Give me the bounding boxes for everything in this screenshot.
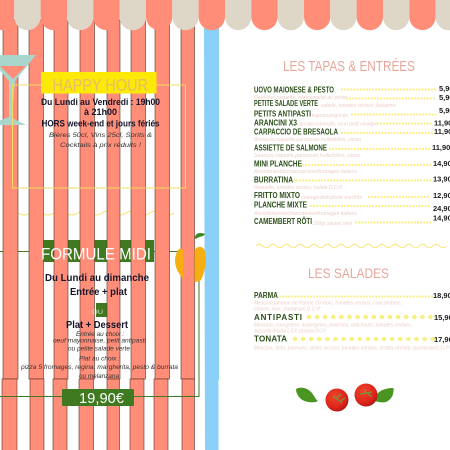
- item: carpaccio: Bresaola,roquette,parmesan,huiledolive, citron: [254, 137, 361, 143]
- item: burratina: Roquette, tomates cerises, bufala D.O.P.: [254, 185, 343, 191]
- formule midi bottom rule: [0, 396, 199, 398]
- item: planche mixte: PLANCHE MIXTE: [254, 200, 308, 210]
- formule midi choices: pizza 5 fromages, regina, margherita, pesto & burrata: [20, 364, 179, 371]
- item: antipasti: Mesclun, courgettes, aubergines, poivrons, artichauts, tomates cerises,: [254, 322, 412, 328]
- item: assiette de salmone: ASSIETTE DE SALMONE: [254, 144, 328, 152]
- item: parma: PARMA: [254, 291, 278, 300]
- happy hour schedule: HORS week-end et jours fériés: [42, 118, 160, 128]
- happy hour offer: [49, 132, 153, 149]
- formule midi choices: Entrée au choix :: [76, 331, 124, 338]
- item: assiette de salmone: 11,90: [432, 143, 450, 152]
- menu list: salades: [254, 291, 450, 352]
- panel: happy hour: [12, 72, 186, 188]
- formule midi choices: Plat au choix :: [79, 356, 120, 362]
- item: carpaccio: [254, 127, 450, 143]
- menu list: tapas: [253, 84, 450, 227]
- formule midi choices: ou melanzana: [79, 373, 120, 380]
- item: burratina: [254, 174, 450, 191]
- item: tonata: [254, 334, 450, 352]
- item: tonata: TONATA: [254, 334, 287, 344]
- heading: les tapas et entrees: LES TAPAS & ENTRÉES: [283, 58, 415, 75]
- plat dessert: Plat + Dessert: [66, 319, 128, 331]
- item: carpaccio: CARPACCIO DE BRESAOLA: [254, 128, 338, 136]
- ou label: OU: [92, 310, 103, 316]
- item: antipasti: ANTIPASTI: [254, 313, 302, 322]
- item: planche mixte: Assortimentdecharcuterieetfromages italiens: [253, 211, 357, 217]
- happy hour outline: [12, 85, 186, 188]
- item: planche mixte: [253, 200, 450, 217]
- formule midi offer: Entrée + plat: [70, 286, 127, 298]
- blue stripe: [204, 25, 219, 450]
- item: antipasti: [254, 313, 450, 334]
- item: petite salade verte: salade, tomates cerises ,balsamic: [321, 103, 396, 109]
- item: petite salade verte: [254, 93, 450, 109]
- item: antipasti: mozzarella di bufala D.O.P, parmesan D.O.P.: [254, 328, 326, 334]
- item: mini planche: [253, 159, 450, 175]
- decorative yellow wave behind stripes: [18, 211, 174, 215]
- item: camembert: CAMEMBERT RÔTI: [254, 217, 312, 226]
- panel: formule midi outline: [0, 252, 199, 396]
- item: uovo: [254, 84, 450, 101]
- item: uovo: UOVO MAIONESE & PESTO: [254, 86, 334, 94]
- item: mini planche: MINI PLANCHE: [254, 160, 303, 168]
- item: fritto mixto: FRITTO MIXTO: [254, 191, 300, 200]
- awning stripes lower: [2, 379, 194, 450]
- item: petits antipasti: PETITS ANTIPASTI: [254, 110, 311, 118]
- awning stripes upper: [3, 20, 194, 379]
- happy hour schedule: Du Lundi au Vendredi : 19h00: [41, 97, 160, 107]
- right tomato: [354, 384, 378, 406]
- right basil leaf: [375, 388, 394, 402]
- icon: tomatoes and basil: [296, 384, 394, 412]
- item: arancini: ARANCINI X3: [254, 118, 297, 128]
- icon: martini glass: [0, 55, 36, 125]
- panel: formule midi: [20, 244, 179, 407]
- happy hour heading: HAPPY HOUR: [52, 75, 148, 95]
- item: burratina: BURRATINA: [254, 176, 293, 184]
- item: parma: Mesclun,jambon de Parme 20 mois, tomates cerises, concombres,: [254, 300, 402, 306]
- left basil leaf: [296, 388, 318, 402]
- item: assiette de salmone: Saumon,roquette,parmesan,huiledolive, citron: [254, 153, 360, 159]
- happy hour offer: Bières 50cl, Vins 25cl, Sprits &: [49, 132, 153, 139]
- formule midi choices: [20, 331, 179, 380]
- price badge: [62, 389, 134, 407]
- item: petite salade verte: PETITE SALADE VERTE: [254, 99, 318, 108]
- item: parma: chèvre, noix, parmesan D.O.P.: [254, 306, 321, 312]
- item: camembert: 250gr,sauvet miel: [312, 221, 353, 227]
- item: arancini: sarciacciotomate, mon petit vinaigre: [297, 122, 378, 128]
- item: camembert: [254, 214, 450, 227]
- left tomato: [326, 388, 348, 412]
- formule midi offer: [45, 272, 149, 298]
- icon: yellow pepper: [175, 233, 206, 282]
- formule midi heading background: [43, 240, 154, 262]
- happy hour offer: Cocktails à prix réduits !: [60, 142, 141, 149]
- item: petits antipasti: [254, 106, 450, 119]
- item: parma: [254, 291, 450, 312]
- item: fritto mixto: [254, 191, 450, 201]
- item: assiette de salmone: [254, 143, 450, 159]
- item: arancini: [254, 118, 450, 128]
- item: mini planche: Assortimentdecharcuteriesetfromages italiens: [253, 169, 357, 175]
- item: uovo: Oeuf dur, roquette, mayonnaise au pesto: [254, 95, 347, 101]
- formule midi choices: oeuf mayonnaise, petit antipasti: [53, 338, 147, 344]
- formule midi choices: ou petite salade verte: [68, 346, 131, 352]
- ou badge background: [96, 303, 107, 317]
- item: petits antipasti: légumesmgrinés: [312, 113, 348, 119]
- item: fritto mixto: calongedefruitsde merfrits: [301, 195, 362, 201]
- yellow wave divider: [256, 244, 446, 248]
- price badge: 19,90€: [79, 390, 125, 407]
- happy hour schedule: [41, 97, 160, 128]
- happy hour schedule: à 21h00: [84, 107, 117, 117]
- formule midi offer: Du Lundi au dimanche: [45, 272, 149, 284]
- scalloped awning: [0, 0, 450, 30]
- heading: les salades: LES SALADES: [308, 265, 389, 281]
- formule midi heading: FORMULE MIDI: [41, 244, 151, 264]
